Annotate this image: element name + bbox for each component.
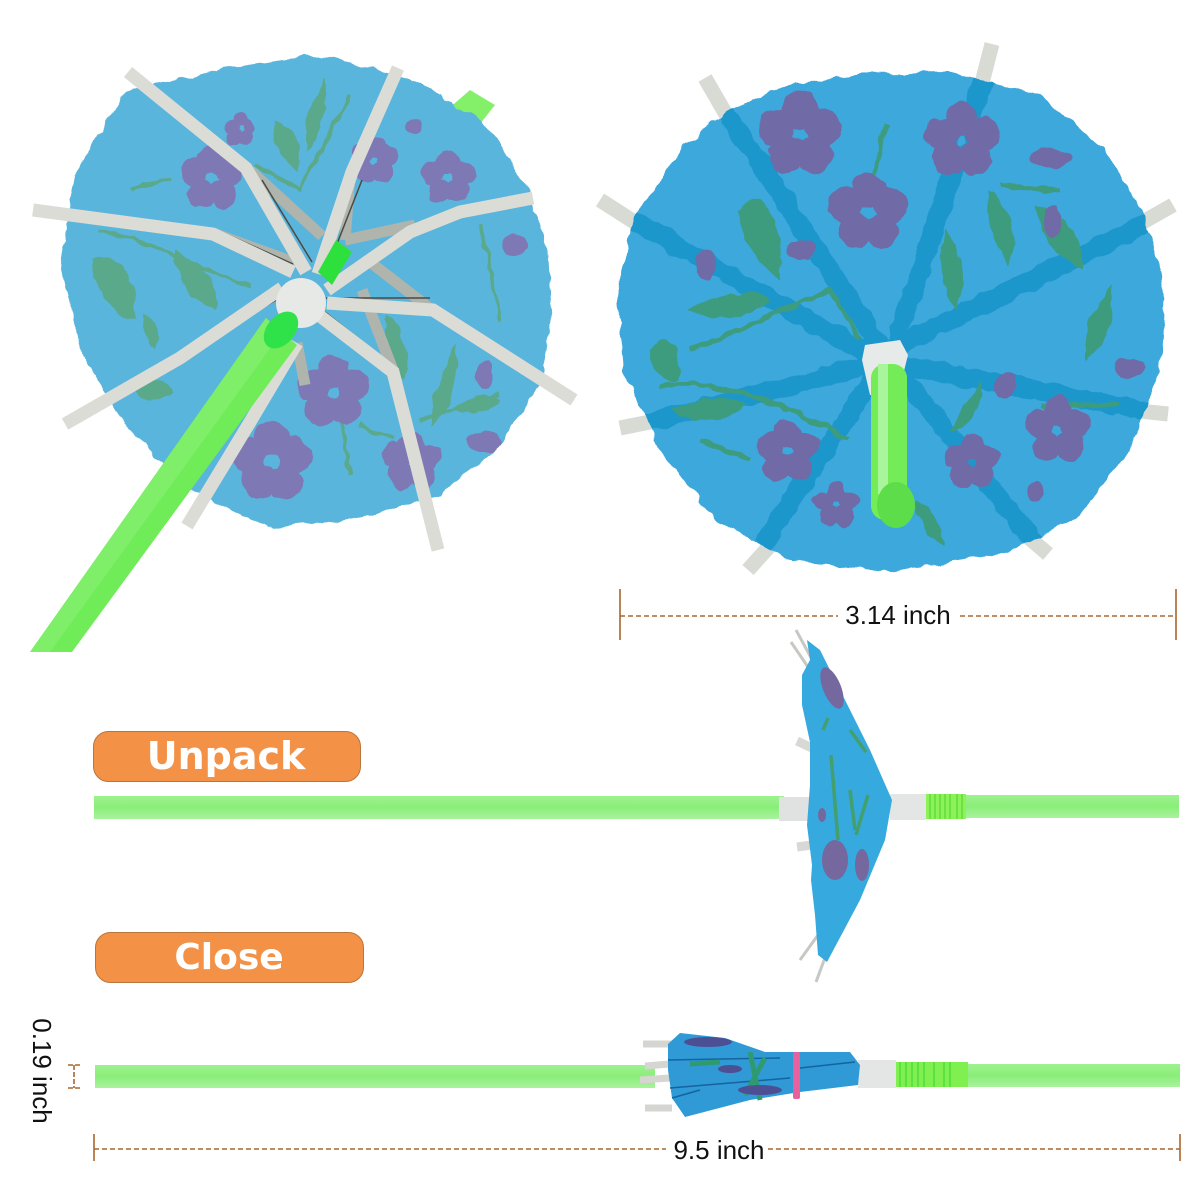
grey inner struts <box>213 170 432 385</box>
badge: Unpack: Unpack <box>147 734 306 778</box>
printed leaves <box>94 78 500 425</box>
outer rib tips <box>600 44 1173 570</box>
canopy <box>802 640 892 962</box>
open umbrella top view <box>600 44 1180 590</box>
dimension: 0.19 inch: 0.19 inch <box>27 1018 57 1124</box>
hub <box>858 1060 896 1088</box>
canopy paper <box>60 54 552 529</box>
printed stems <box>98 95 500 475</box>
straw front <box>30 318 297 652</box>
straw short section <box>965 1064 1180 1087</box>
printed flowers <box>180 114 528 498</box>
printed flowers <box>696 92 1145 526</box>
pink band <box>793 1052 800 1099</box>
straw <box>871 364 907 520</box>
badge: Unpack <box>94 732 360 782</box>
printed stems <box>660 125 1120 460</box>
printed leaves <box>650 190 1112 545</box>
flower centres <box>782 129 1063 457</box>
hub <box>862 340 908 395</box>
dimension: 9.5 inch: 9.5 inch <box>673 1135 765 1165</box>
dimension: 3.14 inch: 3.14 inch <box>845 600 951 630</box>
dark strut shadow lines <box>190 180 430 365</box>
straw long section <box>94 796 784 819</box>
open umbrella underside view <box>30 30 580 652</box>
straw tip behind canopy <box>447 90 495 134</box>
green straw inside hub <box>318 240 352 285</box>
opened umbrella side view <box>94 630 1179 982</box>
rib tips <box>640 1044 675 1108</box>
grey ribs <box>33 68 574 550</box>
straw short section <box>964 795 1179 818</box>
darker rib bands <box>630 78 1149 550</box>
closed umbrella side view <box>95 1033 1180 1117</box>
bendy section <box>925 794 966 819</box>
folded canopy <box>668 1033 860 1117</box>
hubs <box>779 797 815 821</box>
bendy section <box>895 1062 968 1087</box>
badge: Close: Close <box>174 937 284 978</box>
badge: Close <box>96 932 364 982</box>
ribs <box>791 630 826 982</box>
flower centres <box>207 171 452 469</box>
canopy paper <box>616 70 1166 572</box>
print <box>815 664 869 881</box>
straw long section <box>95 1065 655 1088</box>
white hub <box>276 278 326 328</box>
dimension: 0.19 inch <box>27 1018 80 1124</box>
